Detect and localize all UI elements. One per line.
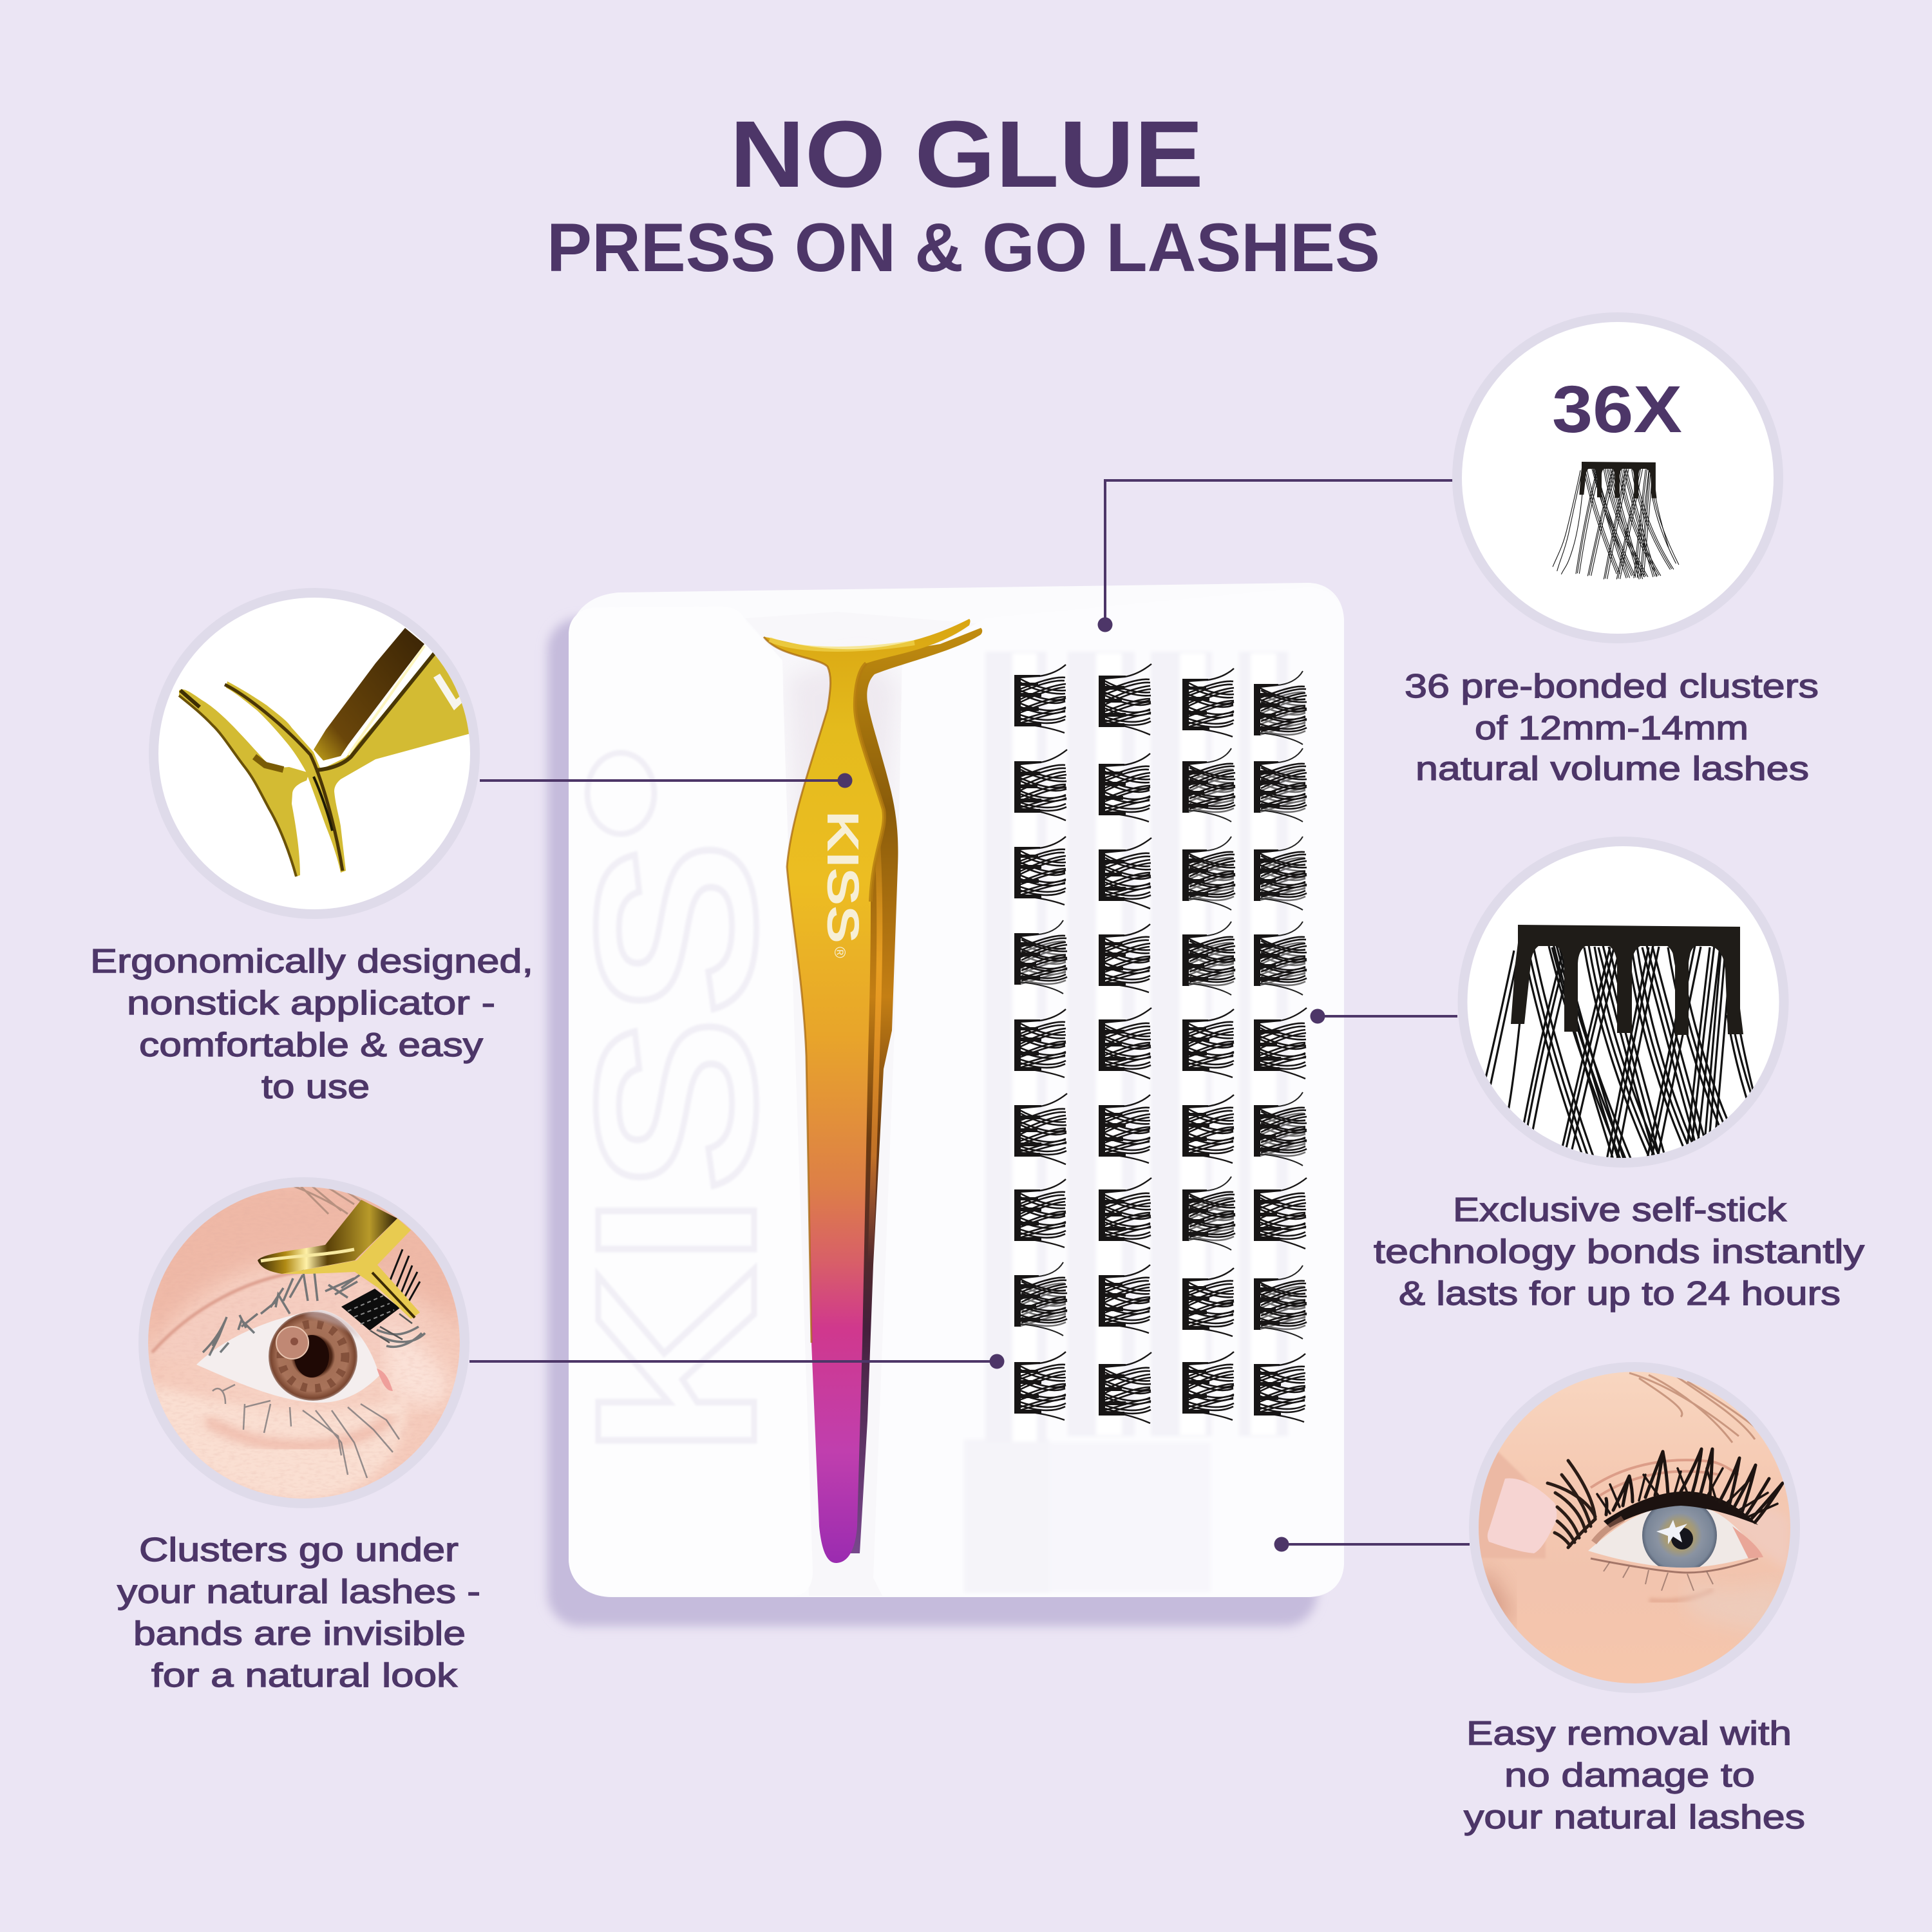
text: easy removal: Easy removal with bbox=[1466, 1715, 1792, 1752]
product tray bbox=[547, 583, 1344, 1626]
text: self-stick technology: technology bonds instantly bbox=[1374, 1233, 1864, 1271]
eye white bbox=[1588, 1504, 1760, 1567]
text: applicator bbox=[90, 943, 533, 1106]
tray shadow bbox=[547, 618, 1317, 1626]
eyelid crease bbox=[1591, 1460, 1739, 1497]
text: easy removal: your natural lashes bbox=[1464, 1799, 1805, 1836]
upper skin bbox=[148, 1187, 459, 1347]
text: clusters under lashes: Clusters go under bbox=[139, 1531, 459, 1569]
text: pre-bonded clusters bbox=[1405, 668, 1819, 788]
eye white bbox=[196, 1310, 379, 1403]
text: clusters under lashes: your natural lashes - bbox=[117, 1573, 480, 1611]
text: pre-bonded clusters: natural volume lashes bbox=[1416, 750, 1809, 788]
text: applicator: to use bbox=[261, 1068, 370, 1106]
tray body bbox=[569, 583, 1344, 1597]
tear duct bbox=[1732, 1526, 1763, 1558]
applicator body bbox=[226, 654, 480, 873]
fingertip bbox=[1462, 1443, 1546, 1558]
text: applicator: comfortable & easy bbox=[139, 1027, 483, 1064]
single lash cluster bbox=[1553, 462, 1679, 579]
back prong highlight bbox=[871, 837, 880, 1262]
iris bbox=[269, 1312, 357, 1401]
cluster lash bbox=[341, 1289, 400, 1331]
lower skin bbox=[148, 1385, 406, 1501]
text: easy removal: no damage to bbox=[1504, 1757, 1755, 1794]
text: self-stick technology bbox=[1374, 1191, 1864, 1312]
iris bbox=[1642, 1498, 1717, 1573]
brow bbox=[1629, 1373, 1758, 1443]
36X label: 36X bbox=[1552, 372, 1682, 446]
left prong bbox=[179, 689, 309, 876]
callout line: eye circle to clusters bbox=[469, 1354, 1005, 1369]
natural lashes bbox=[203, 1269, 425, 1356]
callout line: removal circle to tray bbox=[1274, 1537, 1470, 1552]
callout line: 36X circle to lash tray bbox=[1097, 480, 1454, 632]
text: self-stick technology: Exclusive self-stick bbox=[1453, 1191, 1787, 1229]
lash channels bbox=[964, 652, 1288, 1593]
circle: 36X lash count bbox=[1452, 312, 1783, 643]
logo on applicator: KISS bbox=[818, 811, 868, 943]
title bbox=[547, 102, 1380, 286]
circle: applicator tip bbox=[149, 588, 480, 919]
eyelid bbox=[285, 1309, 299, 1316]
right panel bbox=[873, 587, 1344, 1596]
dark inner band bbox=[314, 628, 424, 761]
text: pre-bonded clusters: 36 pre-bonded clusters bbox=[1405, 668, 1819, 705]
text: self-stick technology: & lasts for up to 24 hours bbox=[1399, 1275, 1841, 1312]
text: pre-bonded clusters: of 12mm-14mm bbox=[1475, 710, 1748, 747]
skin texture bbox=[160, 1353, 446, 1492]
back prong bbox=[837, 628, 982, 1553]
text: clusters under lashes: bands are invisible bbox=[133, 1615, 466, 1653]
circle: easy removal bbox=[1462, 1362, 1800, 1693]
title: NO GLUE bbox=[730, 102, 1204, 207]
detached lash bbox=[1548, 1461, 1595, 1548]
text: applicator: nonstick applicator - bbox=[127, 985, 495, 1022]
title: PRESS ON & GO LASHES bbox=[547, 209, 1380, 286]
text: clusters under lashes: for a natural look bbox=[151, 1657, 458, 1694]
text: easy removal bbox=[1464, 1715, 1805, 1836]
text: applicator: Ergonomically designed, bbox=[90, 943, 533, 980]
lower lash line bbox=[1591, 1558, 1758, 1573]
circle: macro lash bbox=[1431, 837, 1810, 1278]
circle: cluster under natural lashes bbox=[138, 1177, 469, 1508]
left panel bbox=[569, 607, 813, 1596]
fingernail bbox=[1488, 1479, 1557, 1553]
callout line: macro lash circle to tray bbox=[1310, 1009, 1457, 1024]
embossed logo: KISS bbox=[549, 840, 802, 1458]
callout line: applicator circle to tweezers bbox=[480, 773, 853, 788]
logo fragment bbox=[433, 674, 462, 710]
lash clusters grid bbox=[1014, 664, 1307, 1423]
front blade bbox=[764, 619, 971, 1563]
applicator in eye bbox=[258, 1200, 397, 1274]
logo on applicator: ® bbox=[831, 947, 848, 958]
under-eye shading bbox=[1649, 1589, 1713, 1601]
brow bbox=[294, 1187, 361, 1215]
applicator tweezers bbox=[764, 619, 982, 1563]
upper lash band bbox=[1604, 1492, 1758, 1528]
tray well around applicator bbox=[745, 612, 992, 1596]
text: clusters under lashes bbox=[117, 1531, 480, 1694]
